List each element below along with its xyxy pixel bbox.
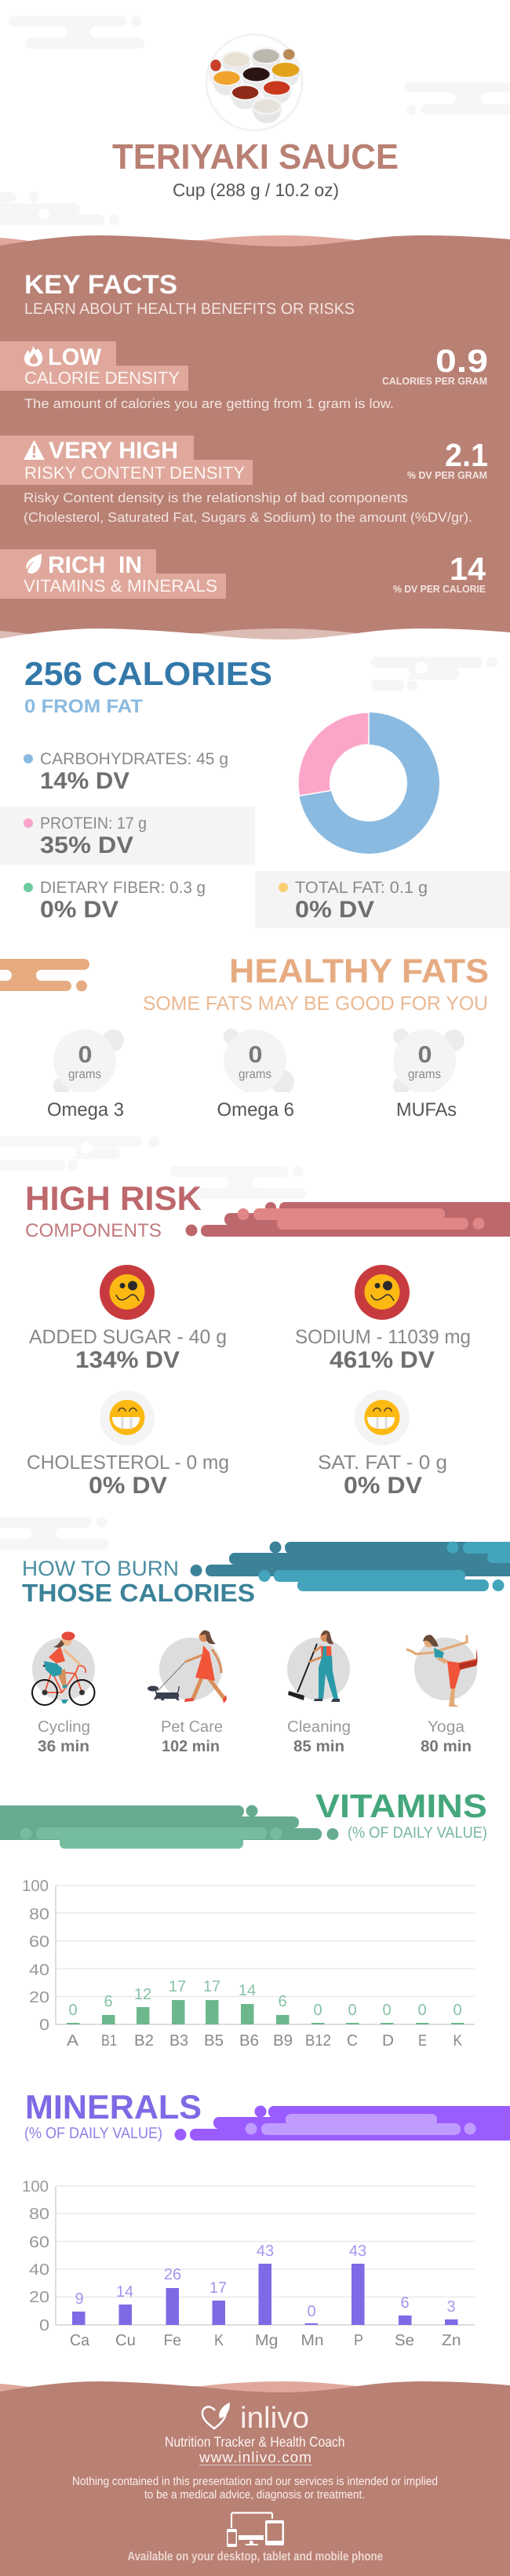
bar chart: vitamins: 40 [29,1962,49,1979]
macro: carbohydrates: 14% DV [40,768,129,794]
stat: mufas: MUFAs [396,1099,457,1120]
bowl: yellow sauce [271,61,301,88]
bar chart: vitamins: 17 [203,1978,220,1995]
activity: cleaning [287,1630,351,1755]
label: low: LOW [48,344,102,370]
fact: rich in vitamins and minerals [0,549,486,599]
subheading: components: COMPONENTS [25,1220,162,1241]
bar chart: vitamins: B6 [239,2032,259,2050]
macro: dietary fiber: DIETARY FIBER: 0.3 g [40,879,206,897]
bar chart: minerals: 100 [22,2178,49,2195]
bowl: tan sauce [282,49,296,63]
icon: woman walking a dog [148,1630,227,1703]
bowl: red sauce left [209,59,222,82]
macro: total fat: TOTAL FAT: 0.1 g [295,879,428,897]
bowl: grey sauce [251,47,281,72]
panel: calories [0,655,510,928]
bar chart: vitamins: 17 [169,1978,186,1995]
activity: cycling: Cycling [38,1718,90,1736]
disclaimer: to be a medical advice, diagnosis or treatment. [144,2488,365,2501]
item: added sugar [29,1265,227,1373]
bar chart: minerals: 9 [75,2290,84,2308]
bar chart: minerals: 0 [307,2303,316,2320]
heading: how to burn: HOW TO BURN [22,1557,179,1580]
panel: footer [0,2381,510,2576]
item: sodium: SODIUM - 11039 mg [295,1326,471,1348]
bar chart: vitamins: 0 [39,2017,49,2034]
icon: warning triangle [24,440,45,460]
decoration: orange bars [0,959,89,992]
panel: how to burn calories [0,1517,510,1755]
item: added sugar: 134% DV [75,1347,180,1373]
bar chart: vitamins: 6 [104,1993,113,2010]
stat: omega 6: Omega 6 [217,1099,294,1120]
bowl: red sauce [262,79,292,104]
macro: carbohydrates [24,750,228,794]
activity: yoga [406,1635,477,1755]
bar chart: vitamins: B12 [305,2032,331,2050]
item: cholesterol [27,1390,229,1499]
decoration: purple bars [174,2106,510,2141]
macro: dietary fiber: 0% DV [40,897,118,923]
disclaimer: Nothing contained in this presentation and our services is intended or implied [72,2475,438,2488]
bar chart: minerals: 3 [446,2298,456,2315]
icon: leaf [26,554,42,574]
activity: cycling: 36 min [38,1738,89,1755]
bar chart: minerals: 43 [257,2243,274,2260]
bar chart: vitamins: B2 [134,2032,154,2050]
item: added sugar: ADDED SUGAR - 40 g [29,1326,227,1348]
bowl: dark teriyaki sauce [241,65,271,91]
macro: total fat: 0% DV [295,897,374,923]
bar chart: vitamins: 0 [453,2002,462,2019]
item: sodium: 461% DV [330,1347,435,1373]
activity: yoga: 80 min [421,1738,472,1755]
description: (Cholesterol, Saturated Fat, Sugars & Sodium) to the amount (%DV/gr). [24,510,472,525]
availability note: Available on your desktop, tablet and mobile phone [127,2550,383,2563]
macro: protein [0,807,255,865]
activity: pet care: Pet Care [161,1718,223,1736]
label: risky content density: RISKY CONTENT DENSITY [24,463,245,483]
subheading: from fat: 0 FROM FAT [24,696,143,717]
bar chart: minerals: Zn [442,2332,461,2349]
value: 14 [450,551,486,587]
macro: total fat [255,871,510,928]
bottom wave [0,629,510,660]
item: sodium [295,1265,471,1373]
bowl: cream sauce [221,50,251,75]
bar chart: vitamins: 6 [278,1993,287,2010]
unit: CALORIES PER GRAM [382,375,487,387]
icon: woman in dancer yoga pose [406,1635,477,1707]
stat: omega 3: grams [68,1068,101,1081]
bar chart: minerals: 0 [39,2317,49,2334]
bar chart: minerals: 26 [164,2266,181,2283]
serving size: Cup (288 g / 10.2 oz) [173,180,339,200]
subheading: LEARN ABOUT HEALTH BENEFITS OR RISKS [24,301,355,318]
decoration: red bars [185,1202,510,1237]
bar chart: minerals: Cu [115,2332,136,2349]
bar chart: vitamins: K [454,2032,463,2050]
bar chart: vitamins: 0 [348,2002,357,2019]
icon: flame [24,345,42,366]
item: saturated fat: 0% DV [344,1473,422,1499]
bar chart: vitamins: C [347,2032,358,2050]
icon: happy face [100,1390,155,1445]
bar chart: vitamins: 0 [313,2002,322,2019]
bar chart: vitamins: 0 [417,2002,427,2019]
label: calorie density: CALORIE DENSITY [24,368,180,388]
macro: dietary fiber [24,879,206,923]
subheading: (% OF DAILY VALUE) [348,1824,487,1842]
donut chart: calorie sources [298,712,424,838]
item: cholesterol: 0% DV [89,1473,167,1499]
stat: mufas [393,1029,464,1120]
description [24,490,472,525]
bar chart: minerals: 40 [29,2261,49,2279]
bar chart: minerals: 80 [29,2206,49,2223]
activity: pet care: 102 min [162,1738,220,1755]
bar chart: minerals: Ca [70,2332,90,2349]
bar chart: minerals: 20 [29,2289,49,2306]
footer wave [0,2381,510,2413]
icon: devices [227,2512,284,2547]
bar chart: minerals: Fe [163,2332,181,2349]
icon: woman sweeping [287,1630,350,1702]
item: saturated fat: SAT. FAT - 0 g [318,1452,447,1474]
bar chart: vitamins: 0 [68,2002,78,2019]
bar chart: minerals: 17 [209,2279,227,2297]
bar chart: minerals [22,2178,475,2349]
bar chart: minerals: P [354,2332,363,2349]
top wave [0,235,510,267]
decoration: teal bars [190,1541,510,1591]
bar chart: minerals: 14 [116,2283,133,2301]
stat: omega 3: Omega 3 [47,1099,124,1120]
website link: www.inlivo.com [199,2450,311,2466]
label: vitamins and minerals: VITAMINS & MINERALS [24,576,217,596]
bar chart: minerals: Mg [255,2332,278,2349]
icon: cyclist [32,1632,95,1705]
stat: mufas: 0 [417,1042,432,1068]
bar chart: vitamins: A [67,2032,79,2050]
icon: happy face [355,1390,410,1445]
bar chart: vitamins: D [382,2032,394,2050]
icon: sad face [100,1265,155,1320]
activity: yoga: Yoga [428,1718,465,1736]
bar chart: minerals: 60 [29,2234,49,2251]
bar chart: minerals: K [214,2332,224,2349]
bowl: orange sauce [212,69,242,96]
bar chart: vitamins: B3 [169,2032,188,2050]
panel: key facts [0,235,510,660]
decoration: green bars [0,1805,339,1849]
stat: mufas: grams [408,1068,441,1081]
label: very high: VERY HIGH [49,438,178,464]
stat: omega 6: 0 [248,1042,262,1068]
bar chart: vitamins: 14 [239,1982,256,1999]
bar chart: minerals: Mn [301,2332,323,2349]
bar chart: vitamins: E [418,2032,427,2050]
activity: cleaning: Cleaning [287,1718,351,1736]
subheading: (% OF DAILY VALUE) [24,2125,162,2142]
stat: omega 3: 0 [78,1042,93,1068]
unit: % DV PER GRAM [407,469,487,481]
bar chart: vitamins: 12 [134,1986,151,2003]
item: saturated fat [318,1390,447,1499]
panel: minerals [22,2089,510,2349]
icon: sad face [355,1265,410,1320]
description: Risky Content density is the relationship of bad components [24,490,408,505]
description: The amount of calories you are getting from 1 gram is low. [24,396,394,411]
bar chart: minerals: 43 [349,2243,366,2260]
label: rich in: RICH IN [48,552,142,578]
bar chart: vitamins [22,1878,475,2050]
fact: very high risky content density [0,435,488,525]
heading: calories: 256 CALORIES [24,655,272,692]
bar chart: vitamins: 80 [29,1906,49,1923]
stat: omega 3 [47,1029,124,1120]
activity: cycling [32,1632,95,1755]
unit: % DV PER CALORIE [393,583,486,595]
macro: carbohydrates: CARBOHYDRATES: 45 g [40,750,228,768]
stat: omega 6 [217,1029,294,1120]
food image: bowls of sauces [206,35,302,130]
activity: cleaning: 85 min [293,1738,344,1755]
macro: protein: 35% DV [40,833,133,858]
tagline: Nutrition Tracker & Health Coach [165,2434,345,2450]
panel: high risk [0,1136,510,1499]
heading: healthy fats: HEALTHY FATS [229,953,489,990]
bar chart: vitamins: B1 [101,2032,117,2050]
heading: minerals: MINERALS [25,2089,202,2126]
logo: inlivo [202,2402,309,2435]
subheading: SOME FATS MAY BE GOOD FOR YOU [143,993,488,1015]
activity: pet care [148,1630,227,1755]
bar chart: vitamins: B5 [204,2032,224,2050]
bowl: white sauce [252,97,282,123]
panel: vitamins [0,1787,487,2050]
bowl: chunky sauce [231,84,260,109]
heading: key facts: KEY FACTS [24,270,177,300]
heading: vitamins: VITAMINS [315,1787,487,1824]
logo: inlivo: inlivo [240,2402,309,2435]
bar chart: vitamins: 20 [29,1989,49,2006]
disclaimer [72,2475,438,2501]
bar chart: minerals: Se [395,2332,414,2349]
item: cholesterol: CHOLESTEROL - 0 mg [27,1452,229,1474]
bar chart: vitamins: B9 [273,2032,293,2050]
heading: high risk: HIGH RISK [25,1180,202,1218]
stat: omega 6: grams [239,1068,271,1081]
macro: protein: PROTEIN: 17 g [40,814,147,833]
fact: low calorie density [0,341,488,411]
bar chart: vitamins: 100 [22,1878,49,1895]
title: TERIYAKI SAUCE [112,137,399,177]
value: 0.9 [435,343,488,379]
bar chart: vitamins: 0 [382,2002,392,2019]
bar chart: minerals: 6 [400,2294,410,2312]
decorative clouds: header [0,16,510,225]
panel: healthy fats [0,953,489,1120]
bar chart: vitamins: 60 [29,1933,49,1951]
value: 2.1 [445,437,488,473]
heading: those calories: THOSE CALORIES [22,1579,255,1607]
